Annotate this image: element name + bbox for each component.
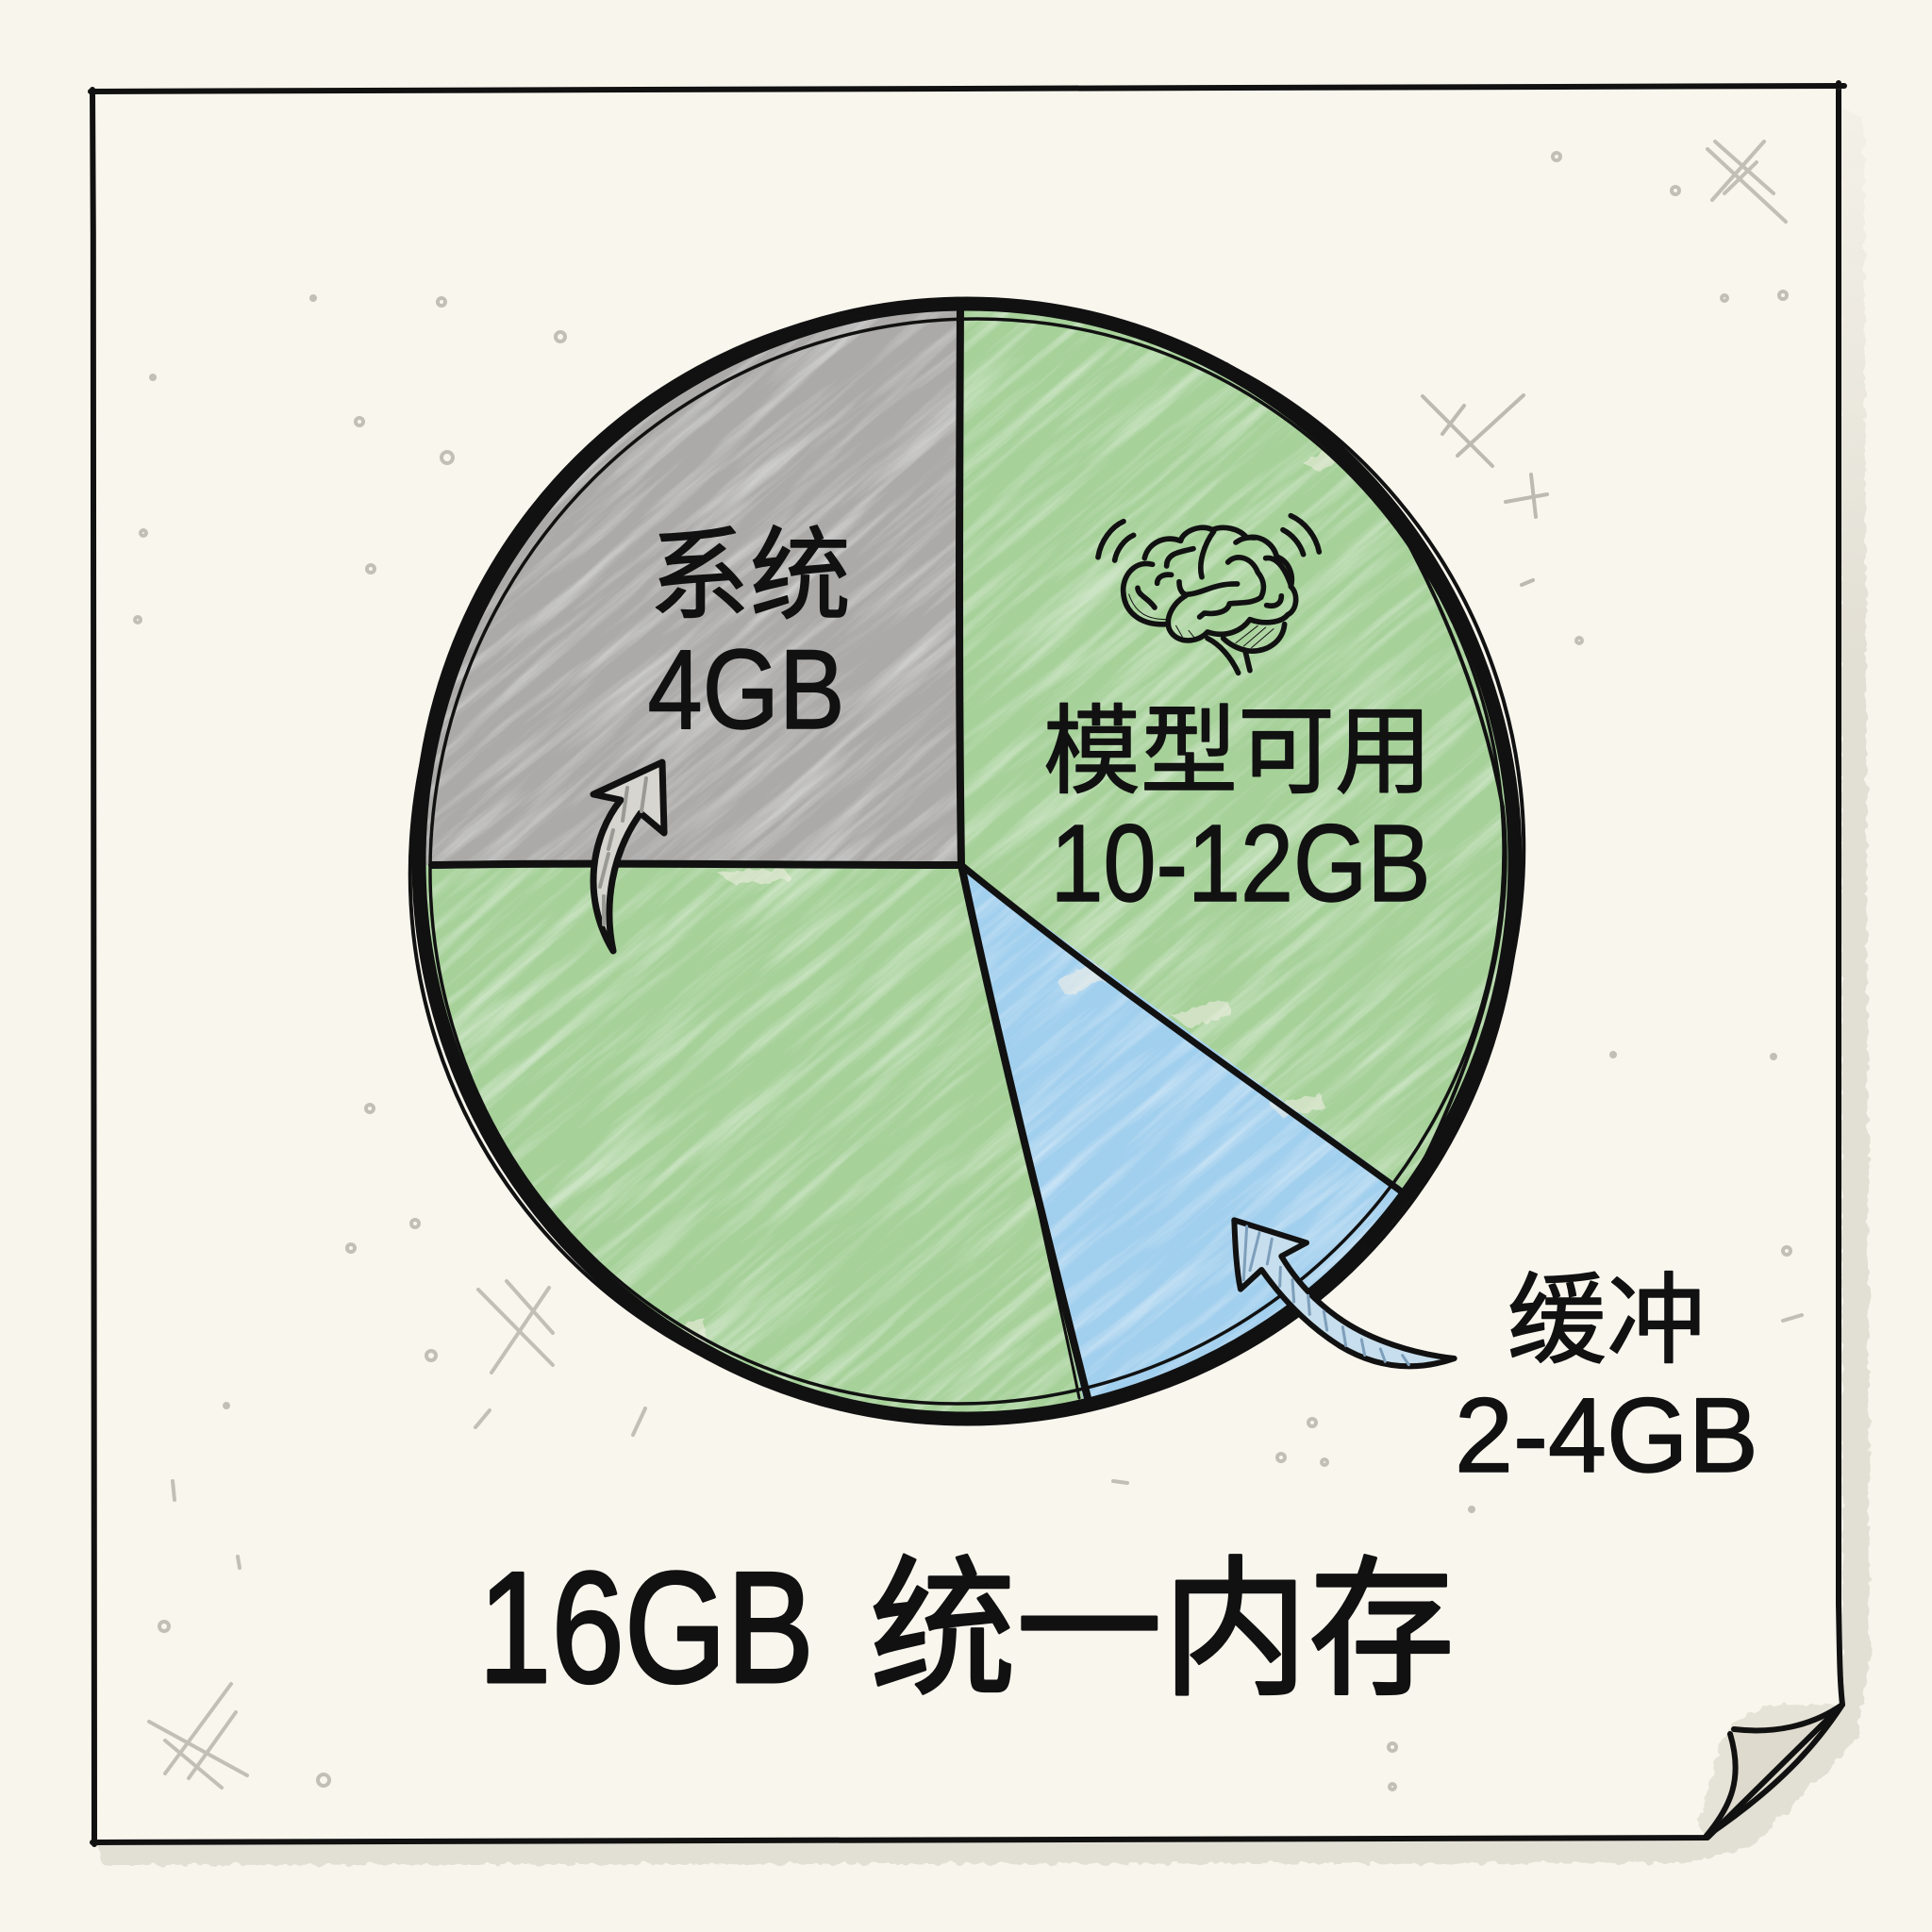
- label: model available 10-12GB: 模型可用: [1043, 697, 1432, 806]
- hand-drawn pie outline: [183, 79, 1751, 1643]
- slice: buffer blue: [961, 865, 1415, 1415]
- crayon streak texture: [426, 311, 1507, 1411]
- arrow: blue pointing to buffer slice: [1234, 1220, 1455, 1366]
- title: 16GB: [478, 1539, 814, 1716]
- label: model available 10-12GB: 10-12GB: [1051, 802, 1430, 924]
- pie chart: [408, 296, 1526, 1426]
- label: model available 10-12GB: [1043, 697, 1432, 924]
- label: system 4GB: 4GB: [647, 626, 845, 753]
- slice: model available green: [406, 283, 1538, 1434]
- sketch star top right: [1707, 142, 1786, 222]
- paper speckle decorations: [135, 153, 1802, 1790]
- label: buffer 2-4GB: 缓冲: [1507, 1266, 1706, 1376]
- slice: system grey: [415, 283, 959, 865]
- label: buffer 2-4GB: [1455, 1266, 1758, 1494]
- label: buffer 2-4GB: 2-4GB: [1455, 1376, 1758, 1494]
- slice fills: [426, 311, 1507, 1411]
- sketch hash bottom left corner: [149, 1684, 247, 1788]
- slice divider lines: [432, 308, 1400, 1398]
- label: system 4GB: 系统: [649, 519, 851, 632]
- arrow: grey pointing to system slice: [593, 762, 664, 951]
- title: [478, 1539, 1455, 1716]
- sketch star bottom left: [475, 1281, 645, 1435]
- title: 统一内存: [870, 1545, 1455, 1714]
- sketch star mid right: [1423, 395, 1547, 585]
- label: system 4GB: [647, 519, 851, 753]
- uncoloured paper gaps along slice edges: [679, 443, 1358, 1349]
- icon: brain: [1098, 516, 1319, 673]
